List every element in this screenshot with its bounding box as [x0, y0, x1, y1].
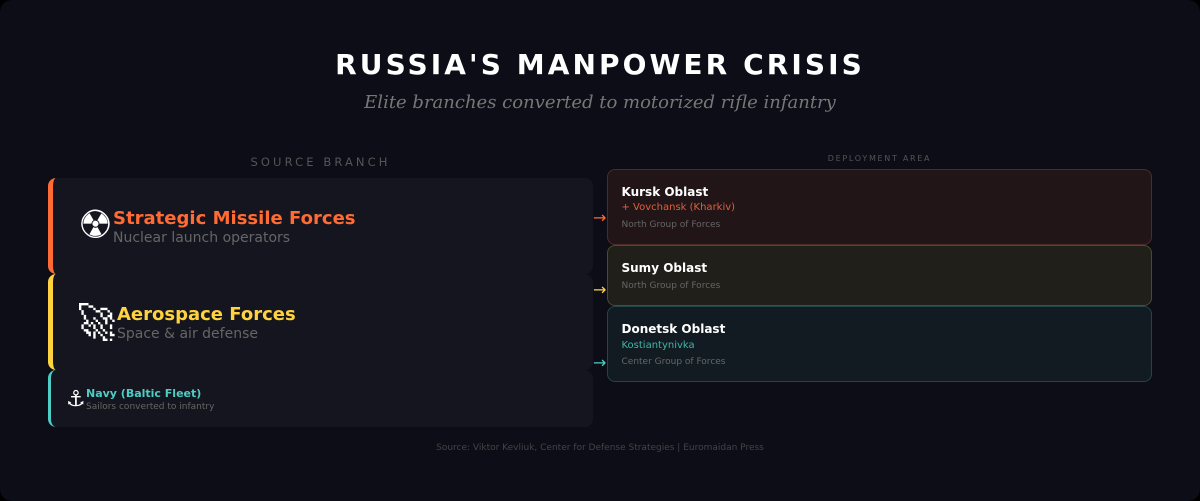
branch name: Aerospace Forces	[117, 304, 296, 325]
source note: Source: Viktor Kevliuk, Center for Defense Strategies | Euromaidan Press	[436, 443, 764, 453]
arrow: Aerospace to Sumy: →	[593, 280, 606, 299]
panel: Aerospace Forces	[48, 274, 593, 370]
heading: source branch: SOURCE BRANCH	[250, 155, 390, 169]
arrow: Navy to Donetsk: →	[593, 353, 606, 372]
title: RUSSIA'S MANPOWER CRISIS	[335, 48, 865, 81]
area name: Sumy Oblast	[622, 261, 707, 275]
branch description: Space & air defense	[117, 326, 258, 342]
force group: Center Group of Forces	[622, 357, 726, 367]
panel: Donetsk Oblast	[607, 306, 1152, 382]
area name: Kursk Oblast	[622, 185, 708, 199]
branch description: Sailors converted to infantry	[86, 402, 214, 412]
panel: Sumy Oblast	[607, 245, 1152, 306]
branch description: Nuclear launch operators	[113, 230, 290, 246]
icon: rocket	[79, 303, 115, 341]
area detail: Kostiantynivka	[622, 340, 695, 351]
icon: radiation: ☢	[78, 203, 113, 248]
panel: Strategic Missile Forces	[48, 178, 593, 274]
icon: anchor: ⚓	[66, 387, 86, 412]
heading: deployment area: DEPLOYMENT AREA	[828, 154, 931, 163]
arrow: Strategic to Kursk: →	[593, 208, 606, 227]
branch name: Navy (Baltic Fleet)	[86, 387, 201, 400]
branch name: Strategic Missile Forces	[113, 208, 356, 229]
force group: North Group of Forces	[622, 281, 720, 291]
area name: Donetsk Oblast	[622, 322, 725, 336]
area detail: + Vovchansk (Kharkiv)	[622, 202, 735, 213]
panel: Kursk Oblast	[607, 169, 1152, 245]
panel: Navy	[48, 370, 593, 427]
subtitle: Elite branches converted to motorized rifle infantry	[364, 92, 836, 113]
force group: North Group of Forces	[622, 220, 720, 230]
